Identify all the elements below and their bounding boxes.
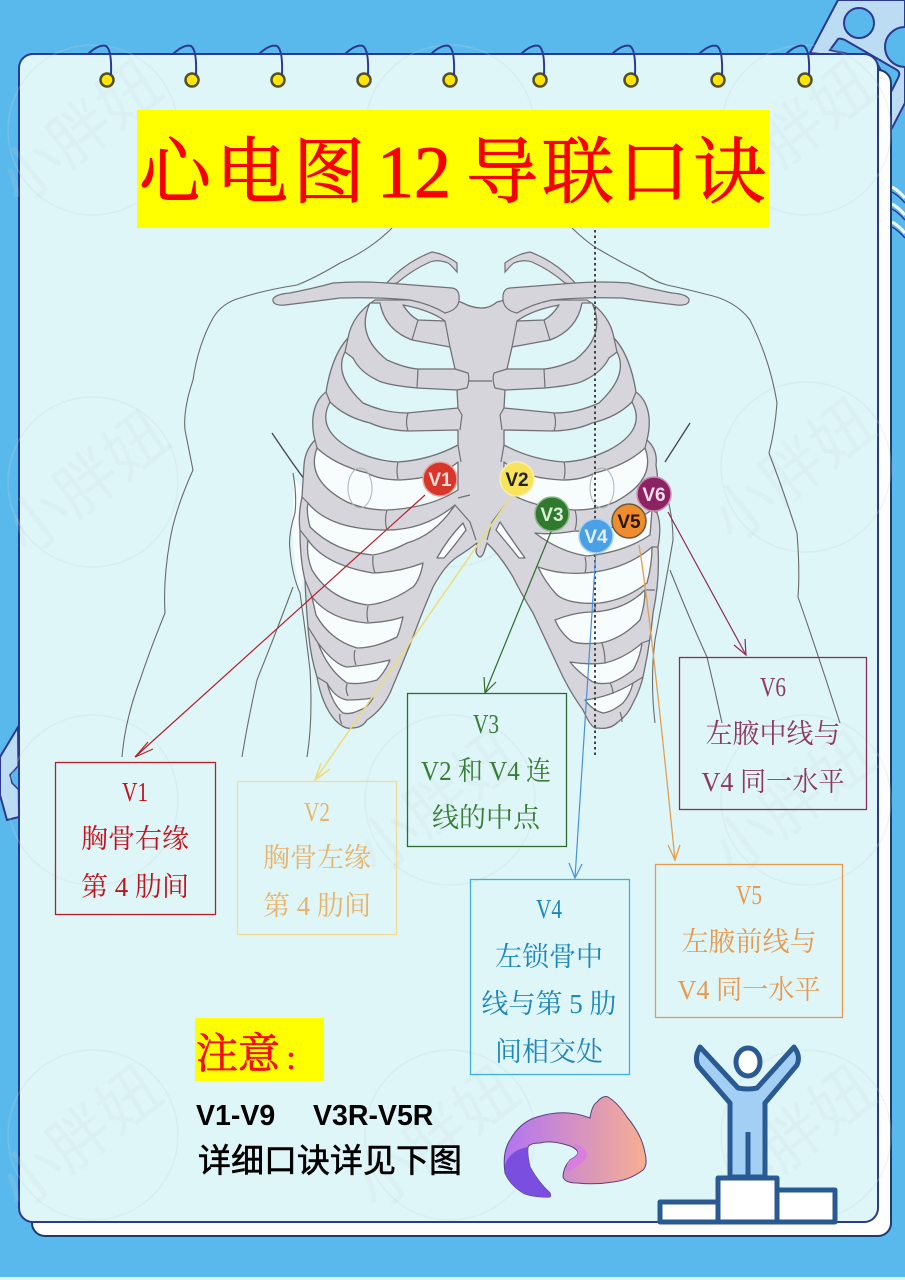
left step — [660, 1202, 718, 1222]
rib cage silhouette — [299, 300, 660, 728]
callout: V5: V4 同一水平 — [678, 975, 820, 1005]
marker V3: V3 — [540, 505, 564, 526]
marker V1: V1 — [428, 470, 452, 491]
callout: V2: 胸骨左缘 — [263, 843, 371, 873]
note text: lead names: V1-V9 — [196, 1100, 275, 1132]
icon: person on podium — [660, 1047, 835, 1222]
watermark pattern: 小胖妞 — [688, 36, 890, 221]
rib cage illustration — [273, 252, 689, 728]
head — [736, 1048, 760, 1076]
marker V5: V5 — [617, 512, 641, 533]
title banner: 导联口诀 — [466, 133, 770, 213]
watermark pattern: 小胖妞 — [688, 1041, 890, 1226]
note text: see below: 详细口诀详见下图 — [198, 1134, 462, 1182]
marker V3 — [535, 497, 569, 531]
icon: decorative shape left edge — [0, 727, 19, 820]
callout: V4: V4 — [536, 894, 562, 924]
callout: V2: V2 — [304, 797, 330, 827]
right step — [777, 1190, 835, 1222]
callout: V1 — [56, 762, 216, 914]
arrow: V5 — [639, 545, 680, 860]
callout: V3 — [408, 694, 566, 846]
callout: V1: 胸骨右缘 — [81, 824, 189, 854]
marker V2: V2 — [505, 470, 529, 491]
midclavicular dotted line — [594, 230, 596, 755]
marker V4 — [579, 519, 613, 553]
middle step — [718, 1178, 777, 1222]
marker V5 — [612, 504, 646, 538]
sternum joint — [468, 380, 492, 382]
callout: V6: V4 同一水平 — [702, 767, 844, 797]
title banner: 12 — [377, 132, 451, 214]
note heading: 注意 — [196, 1021, 280, 1081]
spiral binding rings — [88, 46, 812, 86]
arrow: V3 — [484, 527, 553, 693]
watermark pattern: 小胖妞 — [332, 706, 534, 891]
arrow: V6 — [668, 512, 746, 655]
decorative stripes right — [892, 187, 905, 238]
icon: curved arrow — [504, 1097, 646, 1197]
legs divider — [746, 1132, 750, 1177]
arrow: V2 — [315, 498, 510, 780]
callout: V5 — [656, 864, 842, 1018]
callout: V6: V6 — [760, 672, 786, 702]
watermark pattern: 小胖妞 — [688, 706, 890, 891]
icon: decorative gear top right — [810, 0, 905, 130]
callout: V3: V2 和 V4 连 — [421, 756, 551, 786]
callout: V5: 左腋前线与 — [682, 927, 816, 957]
title banner: 心电图 — [139, 133, 370, 213]
callout: V6: 左腋中线与 — [706, 719, 840, 749]
electrode markers — [423, 462, 671, 553]
callout: V2 — [238, 782, 396, 934]
callout: V4: 左锁骨中 — [495, 942, 603, 972]
marker V1 — [423, 462, 457, 496]
callout: V3: 线的中点 — [432, 803, 541, 833]
right upper intercostal spaces — [493, 252, 689, 530]
callout: V4: 间相交处 — [495, 1037, 603, 1067]
note text: lead names: V3R-V5R — [313, 1100, 433, 1132]
left lower intercostal spaces — [300, 495, 476, 724]
callout: V4 — [470, 880, 630, 1074]
watermark pattern: 小胖妞 — [332, 1041, 534, 1226]
left upper intercostal spaces — [273, 252, 469, 530]
marker V6: V6 — [642, 485, 666, 506]
callout: V6 — [680, 658, 866, 810]
marker V2 — [500, 462, 534, 496]
body outline — [122, 228, 840, 757]
arrow: V1 — [135, 495, 425, 757]
watermark pattern: 小胖妞 — [688, 374, 890, 559]
right lower intercostal spaces — [487, 505, 658, 722]
callout: V5: V5 — [736, 880, 762, 910]
callout: V1: V1 — [122, 777, 148, 807]
figure — [696, 1047, 798, 1177]
callout: V2: 第 4 肋间 — [263, 891, 371, 921]
marker V4: V4 — [584, 527, 608, 548]
note heading: ： — [284, 1035, 314, 1079]
callout: V4: 线与第 5 肋 — [482, 989, 616, 1019]
arrow: V4 — [569, 550, 596, 878]
note heading — [195, 1018, 324, 1081]
title banner — [137, 110, 770, 228]
callout: V1: 第 4 肋间 — [81, 872, 189, 902]
callout: V3: V3 — [473, 709, 499, 739]
marker V6 — [637, 477, 671, 511]
